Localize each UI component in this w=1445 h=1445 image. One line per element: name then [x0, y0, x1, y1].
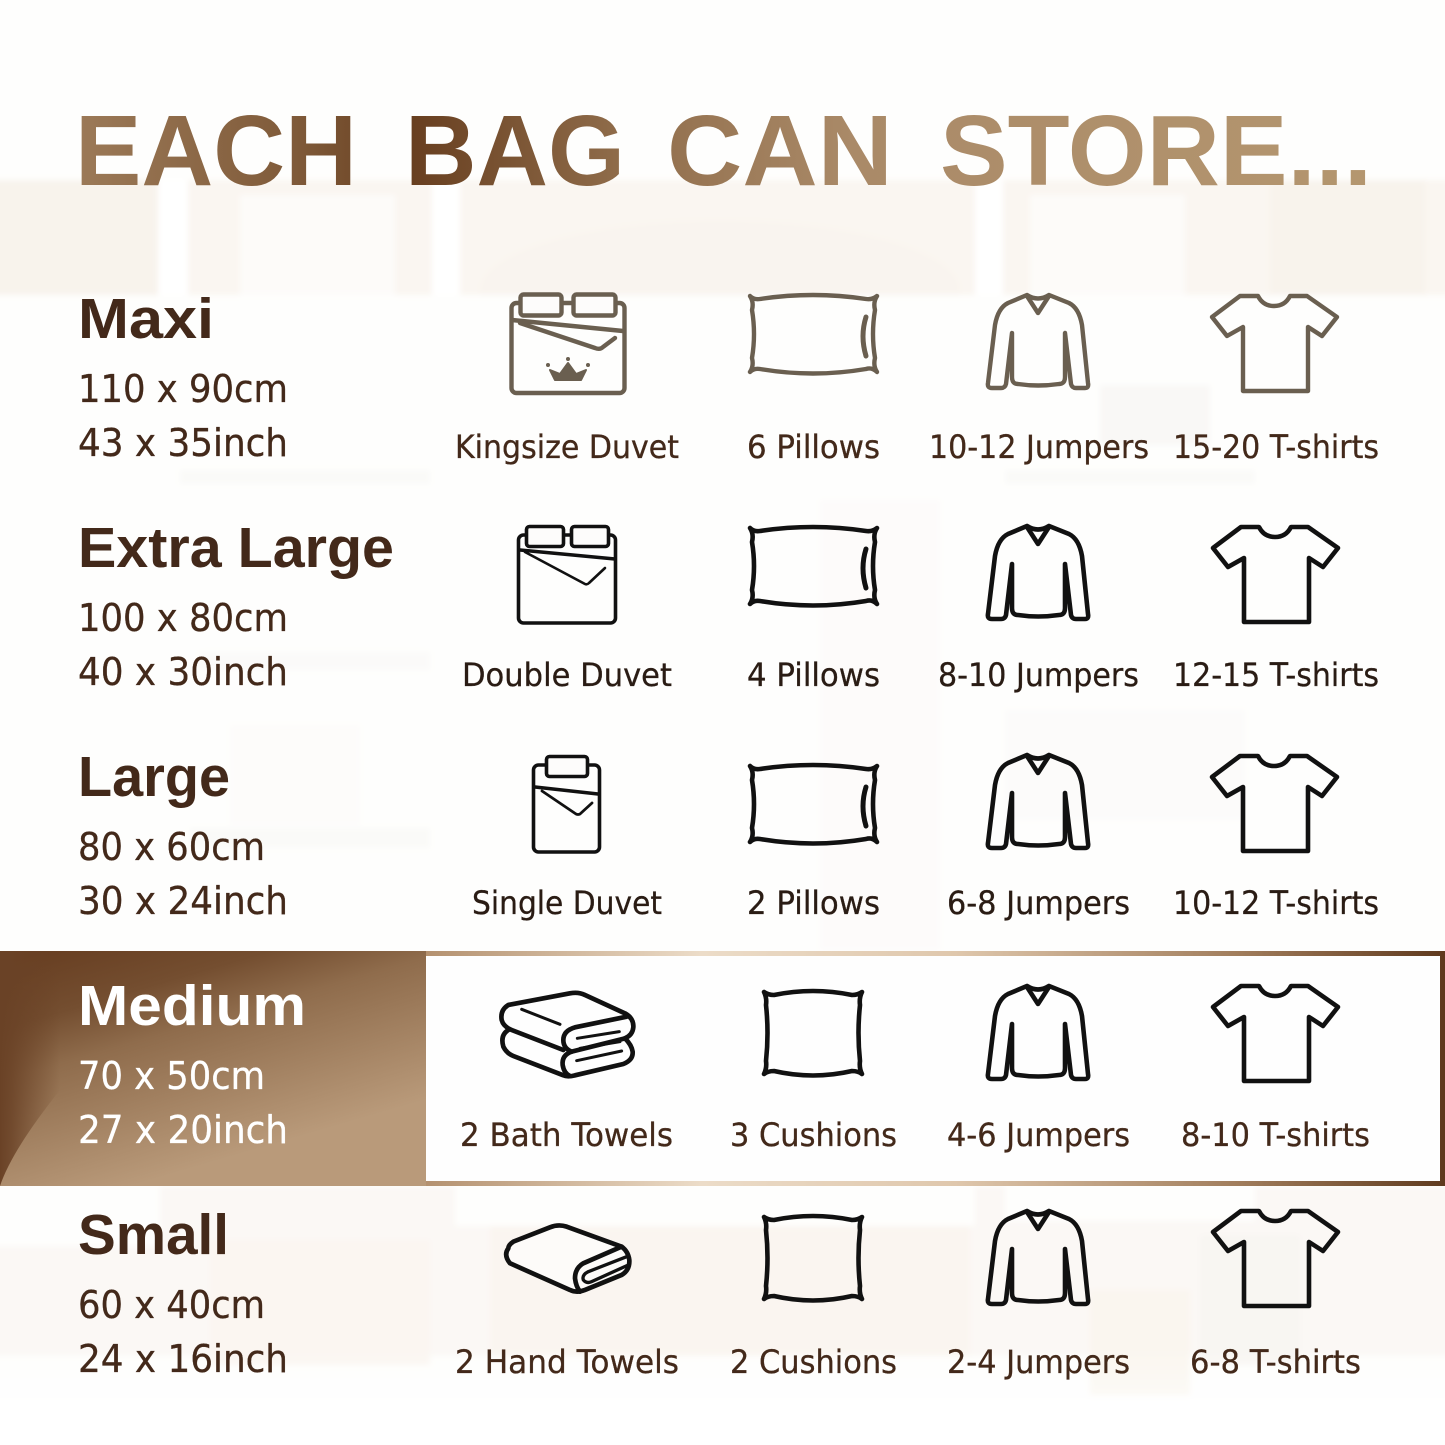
icon: jumper [988, 1211, 1088, 1304]
dimensions: Extra Large cm: 100 x 80cm [78, 596, 288, 640]
icon: jumper [988, 295, 1088, 388]
icon: jumper [988, 755, 1088, 848]
icon: cushion [764, 1216, 862, 1300]
dimensions: Extra Large inch: 40 x 30inch [78, 650, 288, 694]
icon: bath towels [501, 993, 633, 1076]
icon: single duvet [534, 756, 600, 852]
title [75, 95, 1372, 207]
title: BAG [405, 95, 625, 207]
icon: double duvet [518, 526, 616, 623]
icon: pillow [750, 527, 877, 606]
label: 6 Pillows: 6 Pillows [747, 428, 880, 466]
label: 15-20 T-shirts: 15-20 T-shirts [1173, 428, 1379, 466]
label: Kingsize Duvet: Kingsize Duvet [455, 428, 679, 466]
label: 3 Cushions: 3 Cushions [730, 1116, 897, 1154]
icon: t-shirt [1213, 527, 1338, 622]
brown size panel [0, 951, 426, 1186]
icon: t-shirt [1212, 296, 1337, 391]
label: Double Duvet: Double Duvet [462, 656, 672, 694]
icon: jumper [988, 526, 1088, 619]
icon: kingsize duvet [512, 294, 624, 393]
icon: cushion [764, 991, 862, 1076]
dimensions: Medium inch: 27 x 20inch [78, 1108, 288, 1152]
panel: Extra Large row [78, 516, 1379, 694]
heading: Extra Large: Extra Large [78, 516, 394, 580]
title: EACH [75, 95, 357, 207]
label: 2 Pillows: 2 Pillows [747, 884, 880, 922]
dimensions: Large cm: 80 x 60cm [78, 825, 265, 869]
heading: Maxi: Maxi [78, 287, 214, 351]
dimensions: Medium cm: 70 x 50cm [78, 1054, 265, 1098]
label: 12-15 T-shirts: 12-15 T-shirts [1173, 656, 1379, 694]
heading: Medium: Medium [78, 974, 306, 1038]
dimensions: Large inch: 30 x 24inch [78, 879, 288, 923]
icon: pillow [750, 295, 877, 374]
highlight frame [426, 951, 1445, 1186]
icon: t-shirt [1213, 986, 1338, 1081]
label: 2-4 Jumpers: 2-4 Jumpers [947, 1343, 1130, 1381]
heading: Large: Large [78, 745, 230, 809]
icon: pillow [750, 765, 877, 844]
label: Single Duvet: Single Duvet [472, 884, 662, 922]
label: 2 Bath Towels: 2 Bath Towels [460, 1116, 673, 1154]
dimensions: Maxi inch: 43 x 35inch [78, 421, 288, 465]
label: 6-8 T-shirts: 6-8 T-shirts [1190, 1343, 1361, 1381]
label: 2 Cushions: 2 Cushions [730, 1343, 897, 1381]
label: 8-10 Jumpers: 8-10 Jumpers [938, 656, 1139, 694]
dimensions: Small inch: 24 x 16inch [78, 1337, 288, 1381]
label: 6-8 Jumpers: 6-8 Jumpers [947, 884, 1130, 922]
icon: t-shirt [1213, 1211, 1338, 1306]
icon: t-shirt [1212, 756, 1337, 851]
label: 10-12 T-shirts: 10-12 T-shirts [1173, 884, 1379, 922]
panel: Medium row highlighted [0, 951, 1445, 1186]
title: STORE... [940, 95, 1372, 207]
label: 8-10 T-shirts: 8-10 T-shirts [1181, 1116, 1370, 1154]
dimensions: Small cm: 60 x 40cm [78, 1283, 265, 1327]
label: 10-12 Jumpers: 10-12 Jumpers [929, 428, 1149, 466]
label: 4-6 Jumpers: 4-6 Jumpers [947, 1116, 1130, 1154]
heading: Small: Small [78, 1203, 229, 1267]
panel: Maxi row [78, 287, 1379, 466]
icon: jumper [988, 986, 1088, 1079]
icon: hand towel [506, 1225, 629, 1292]
label: 4 Pillows: 4 Pillows [747, 656, 880, 694]
label: 2 Hand Towels: 2 Hand Towels [455, 1343, 679, 1381]
title: CAN [667, 95, 893, 207]
panel: Large row [78, 745, 1379, 923]
panel: Small row [78, 1203, 1361, 1381]
dimensions: Maxi cm: 110 x 90cm [78, 367, 288, 411]
